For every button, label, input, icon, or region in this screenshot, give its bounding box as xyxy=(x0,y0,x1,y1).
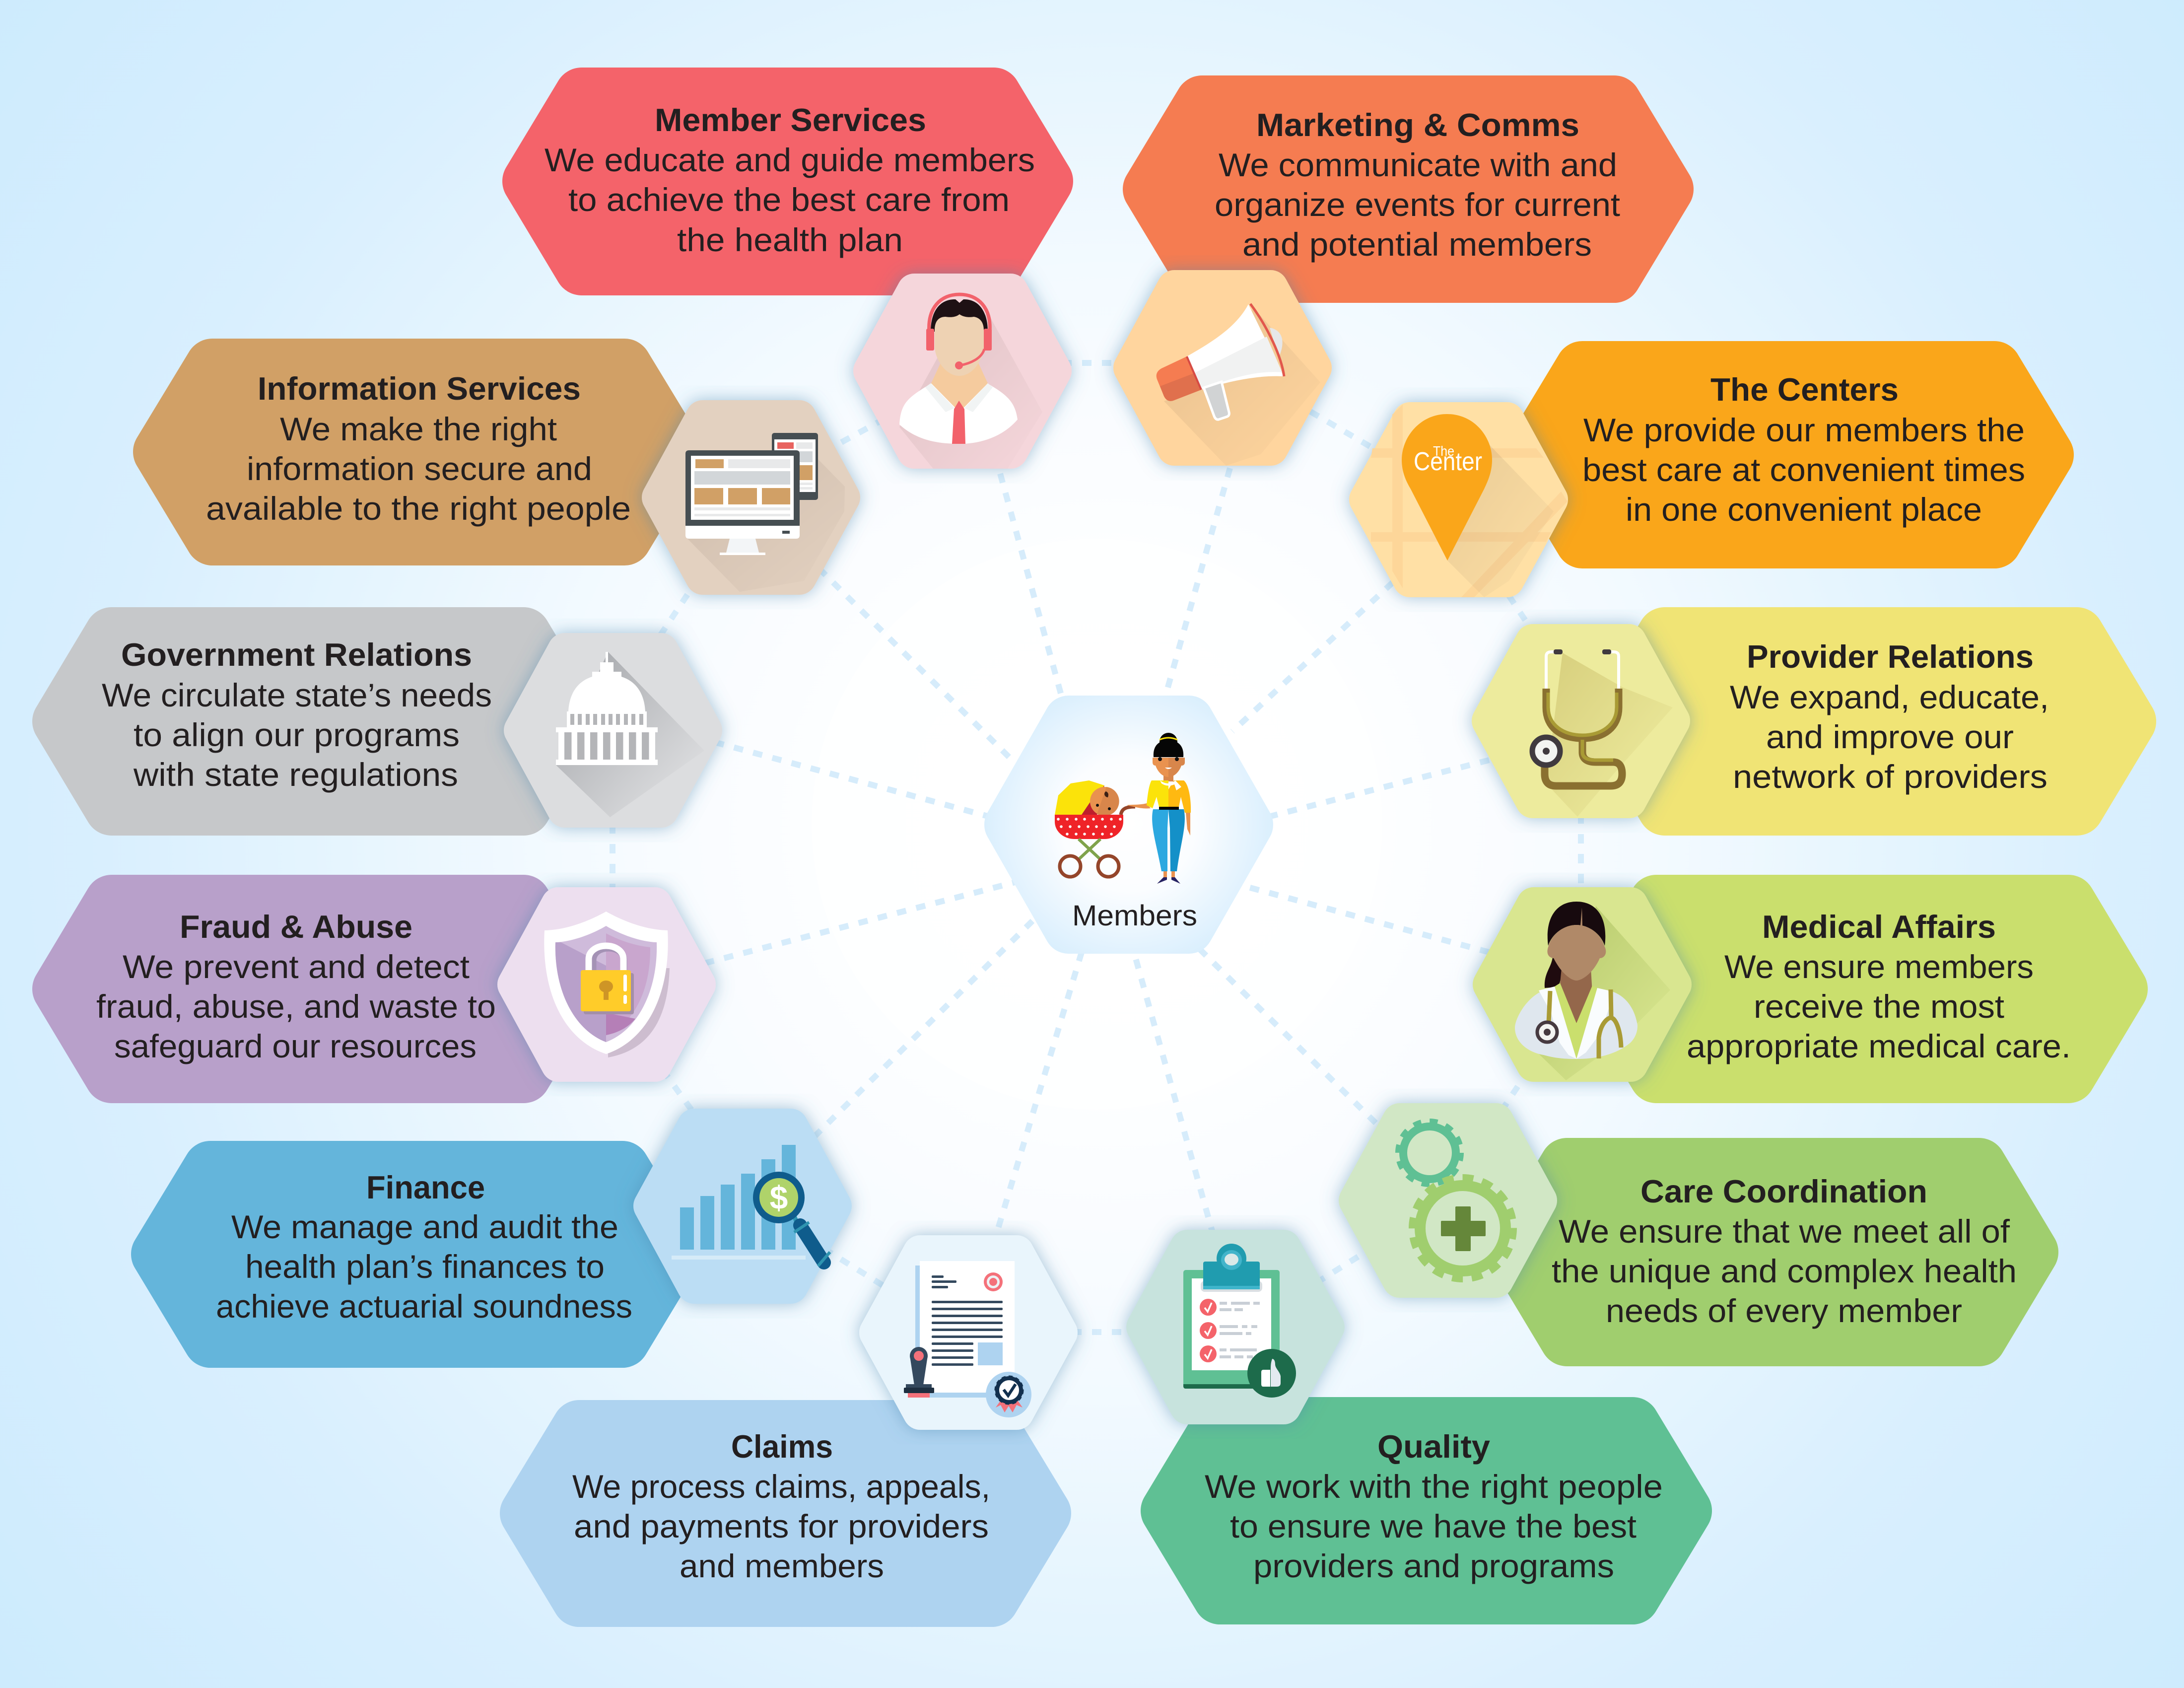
icon: gears with medical cross xyxy=(1398,1122,1513,1279)
description: Medical Affairs: We ensure members xyxy=(1724,948,2034,985)
heading: Claims: Claims xyxy=(731,1428,833,1465)
description: Finance: We manage and audit the xyxy=(231,1208,618,1245)
description: Quality: to ensure we have the best xyxy=(1230,1508,1637,1545)
hexagon: Marketing & Comms xyxy=(1150,103,1666,276)
dotted connector network xyxy=(613,363,1581,1332)
hexagon: Member Services xyxy=(530,95,1046,268)
panel: Information Services xyxy=(160,366,677,538)
icon: stethoscope xyxy=(1532,649,1673,817)
description: Medical Affairs xyxy=(1687,948,2071,1064)
description: Care Coordination xyxy=(1552,1213,2017,1329)
icon: megaphone xyxy=(1157,304,1320,466)
icon panel: gears xyxy=(1356,1121,1540,1280)
description: Claims xyxy=(572,1468,990,1584)
panel: Care Coordination xyxy=(1515,1165,2031,1339)
hexagon: The Centers xyxy=(1530,368,2047,541)
hexagon: Claims xyxy=(527,1427,1044,1600)
description: Information Services: information secure and xyxy=(247,450,592,487)
icon: desktop monitor and tablet xyxy=(685,433,845,592)
panel: Member Services xyxy=(530,95,1046,268)
description: Provider Relations xyxy=(1730,679,2049,795)
description: Fraud & Abuse: safeguard our resources xyxy=(114,1028,477,1064)
hexagon: Fraud & Abuse xyxy=(60,902,576,1076)
hexagon: Care Coordination xyxy=(1515,1165,2031,1339)
description: The Centers: We provide our members the xyxy=(1583,412,2025,448)
icon panel: map pin xyxy=(1366,405,1568,597)
description: Finance xyxy=(216,1208,632,1325)
description: Member Services xyxy=(545,141,1035,258)
icon panel: finance chart xyxy=(651,1126,834,1286)
description: Medical Affairs: receive the most xyxy=(1754,988,2004,1025)
description: Claims: We process claims, appeals, xyxy=(572,1468,990,1505)
hexagon: Government Relations xyxy=(60,634,576,808)
panel: Medical Affairs xyxy=(1604,902,2120,1076)
heading: Information Services: Information Services xyxy=(258,370,581,407)
icon: customer service agent with headset xyxy=(899,294,1042,469)
description: Marketing & Comms xyxy=(1215,146,1620,263)
icon panel: megaphone xyxy=(1131,287,1320,466)
icon: location pin: Center xyxy=(1414,447,1482,476)
icon panel: doctor xyxy=(1490,902,1674,1080)
description: Fraud & Abuse xyxy=(96,948,496,1064)
description: Government Relations: to align our programs xyxy=(134,716,460,753)
description: Information Services: available to the right people xyxy=(206,490,631,527)
panel: Fraud & Abuse xyxy=(60,902,576,1076)
icon panel: shield xyxy=(515,905,698,1064)
heading: Finance: Finance xyxy=(366,1169,485,1205)
heading: The Centers: The Centers xyxy=(1710,371,1899,408)
description: The Centers: in one convenient place xyxy=(1626,491,1982,528)
description: Quality: providers and programs xyxy=(1253,1547,1614,1584)
description: Quality xyxy=(1205,1468,1663,1584)
description: Marketing & Comms: and potential members xyxy=(1242,226,1592,263)
panel: Government Relations xyxy=(60,634,576,808)
description: Care Coordination: We ensure that we meet all of xyxy=(1559,1213,2010,1250)
description: Provider Relations: network of providers xyxy=(1733,758,2048,795)
panel: Finance xyxy=(158,1168,675,1340)
icon panel: document xyxy=(877,1253,1060,1417)
panel: Claims xyxy=(527,1427,1044,1600)
hexagon: Quality xyxy=(1168,1424,1685,1597)
icon panel: clipboard xyxy=(1144,1244,1327,1407)
icon: location pin xyxy=(1402,414,1554,597)
hexagon: Finance xyxy=(158,1168,675,1340)
description: Fraud & Abuse: We prevent and detect xyxy=(123,948,470,985)
description: The Centers xyxy=(1582,412,2025,528)
icon: mother figure xyxy=(1127,733,1191,884)
icon: claim document with stamp and seal xyxy=(904,1261,1031,1417)
description: Member Services: to achieve the best care from xyxy=(568,181,1010,218)
description: Medical Affairs: appropriate medical care. xyxy=(1687,1028,2071,1064)
description: Finance: achieve actuarial soundness xyxy=(216,1288,632,1325)
description: Marketing & Comms: We communicate with and xyxy=(1219,146,1617,183)
description: Provider Relations: We expand, educate, xyxy=(1730,679,2049,715)
hexagon: Medical Affairs xyxy=(1604,902,2120,1076)
label: Members: Members xyxy=(1072,900,1197,932)
panel: Marketing & Comms xyxy=(1150,103,1666,276)
panel: Quality xyxy=(1168,1424,1685,1597)
icon panel: computer xyxy=(659,418,845,592)
description: Finance: health plan’s finances to xyxy=(245,1248,605,1285)
hexagon: Information Services xyxy=(160,366,677,538)
hexagon: Members xyxy=(1009,720,1248,929)
map roads xyxy=(1371,405,1568,597)
description: Information Services xyxy=(206,411,631,527)
icon: bar chart with magnifier xyxy=(672,1145,830,1266)
description: The Centers: best care at convenient times xyxy=(1582,451,2025,488)
heading: Government Relations: Government Relations xyxy=(121,636,472,673)
description: Member Services: the health plan xyxy=(677,221,903,258)
heading: Quality: Quality xyxy=(1377,1428,1490,1465)
heading: Medical Affairs: Medical Affairs xyxy=(1762,909,1996,945)
heading: Marketing & Comms: Marketing & Comms xyxy=(1256,107,1579,143)
icon: shield with padlock xyxy=(544,912,670,1057)
heading: Provider Relations: Provider Relations xyxy=(1747,638,2034,675)
heading: Care Coordination: Care Coordination xyxy=(1640,1173,1927,1209)
description: Quality: We work with the right people xyxy=(1205,1468,1663,1505)
icon panel: capitol xyxy=(521,650,705,817)
description: Member Services: We educate and guide members xyxy=(545,141,1035,178)
icon: clipboard with checklist and thumbs up xyxy=(1183,1244,1296,1398)
description: Claims: and members xyxy=(680,1547,884,1584)
description: Provider Relations: and improve our xyxy=(1766,718,2014,755)
icon panel: agent xyxy=(871,291,1054,469)
heading: Fraud & Abuse: Fraud & Abuse xyxy=(180,909,412,945)
description: Care Coordination: needs of every member xyxy=(1606,1292,1962,1329)
panel: Provider Relations xyxy=(1613,634,2129,808)
heading: Member Services: Member Services xyxy=(655,102,926,138)
icon panel: stethoscope xyxy=(1489,641,1673,817)
icon: bar chart with magnifier: $ xyxy=(770,1179,788,1216)
icon: baby stroller xyxy=(1055,780,1135,877)
description: Fraud & Abuse: fraud, abuse, and waste to xyxy=(96,988,496,1025)
description: Marketing & Comms: organize events for current xyxy=(1215,186,1620,223)
icon: female doctor xyxy=(1515,902,1670,1080)
center panel: Members xyxy=(1009,720,1248,932)
description: Government Relations xyxy=(102,677,492,793)
description: Care Coordination: the unique and complex health xyxy=(1552,1253,2017,1289)
description: Government Relations: with state regulations xyxy=(133,756,458,793)
hexagon: Provider Relations xyxy=(1613,634,2129,808)
description: Claims: and payments for providers xyxy=(574,1508,989,1545)
description: Information Services: We make the right xyxy=(280,411,557,447)
panel: The Centers xyxy=(1530,368,2047,541)
description: Government Relations: We circulate state’s needs xyxy=(102,677,492,713)
icon: capitol building xyxy=(556,652,704,817)
icon: location pin: The xyxy=(1433,443,1454,459)
